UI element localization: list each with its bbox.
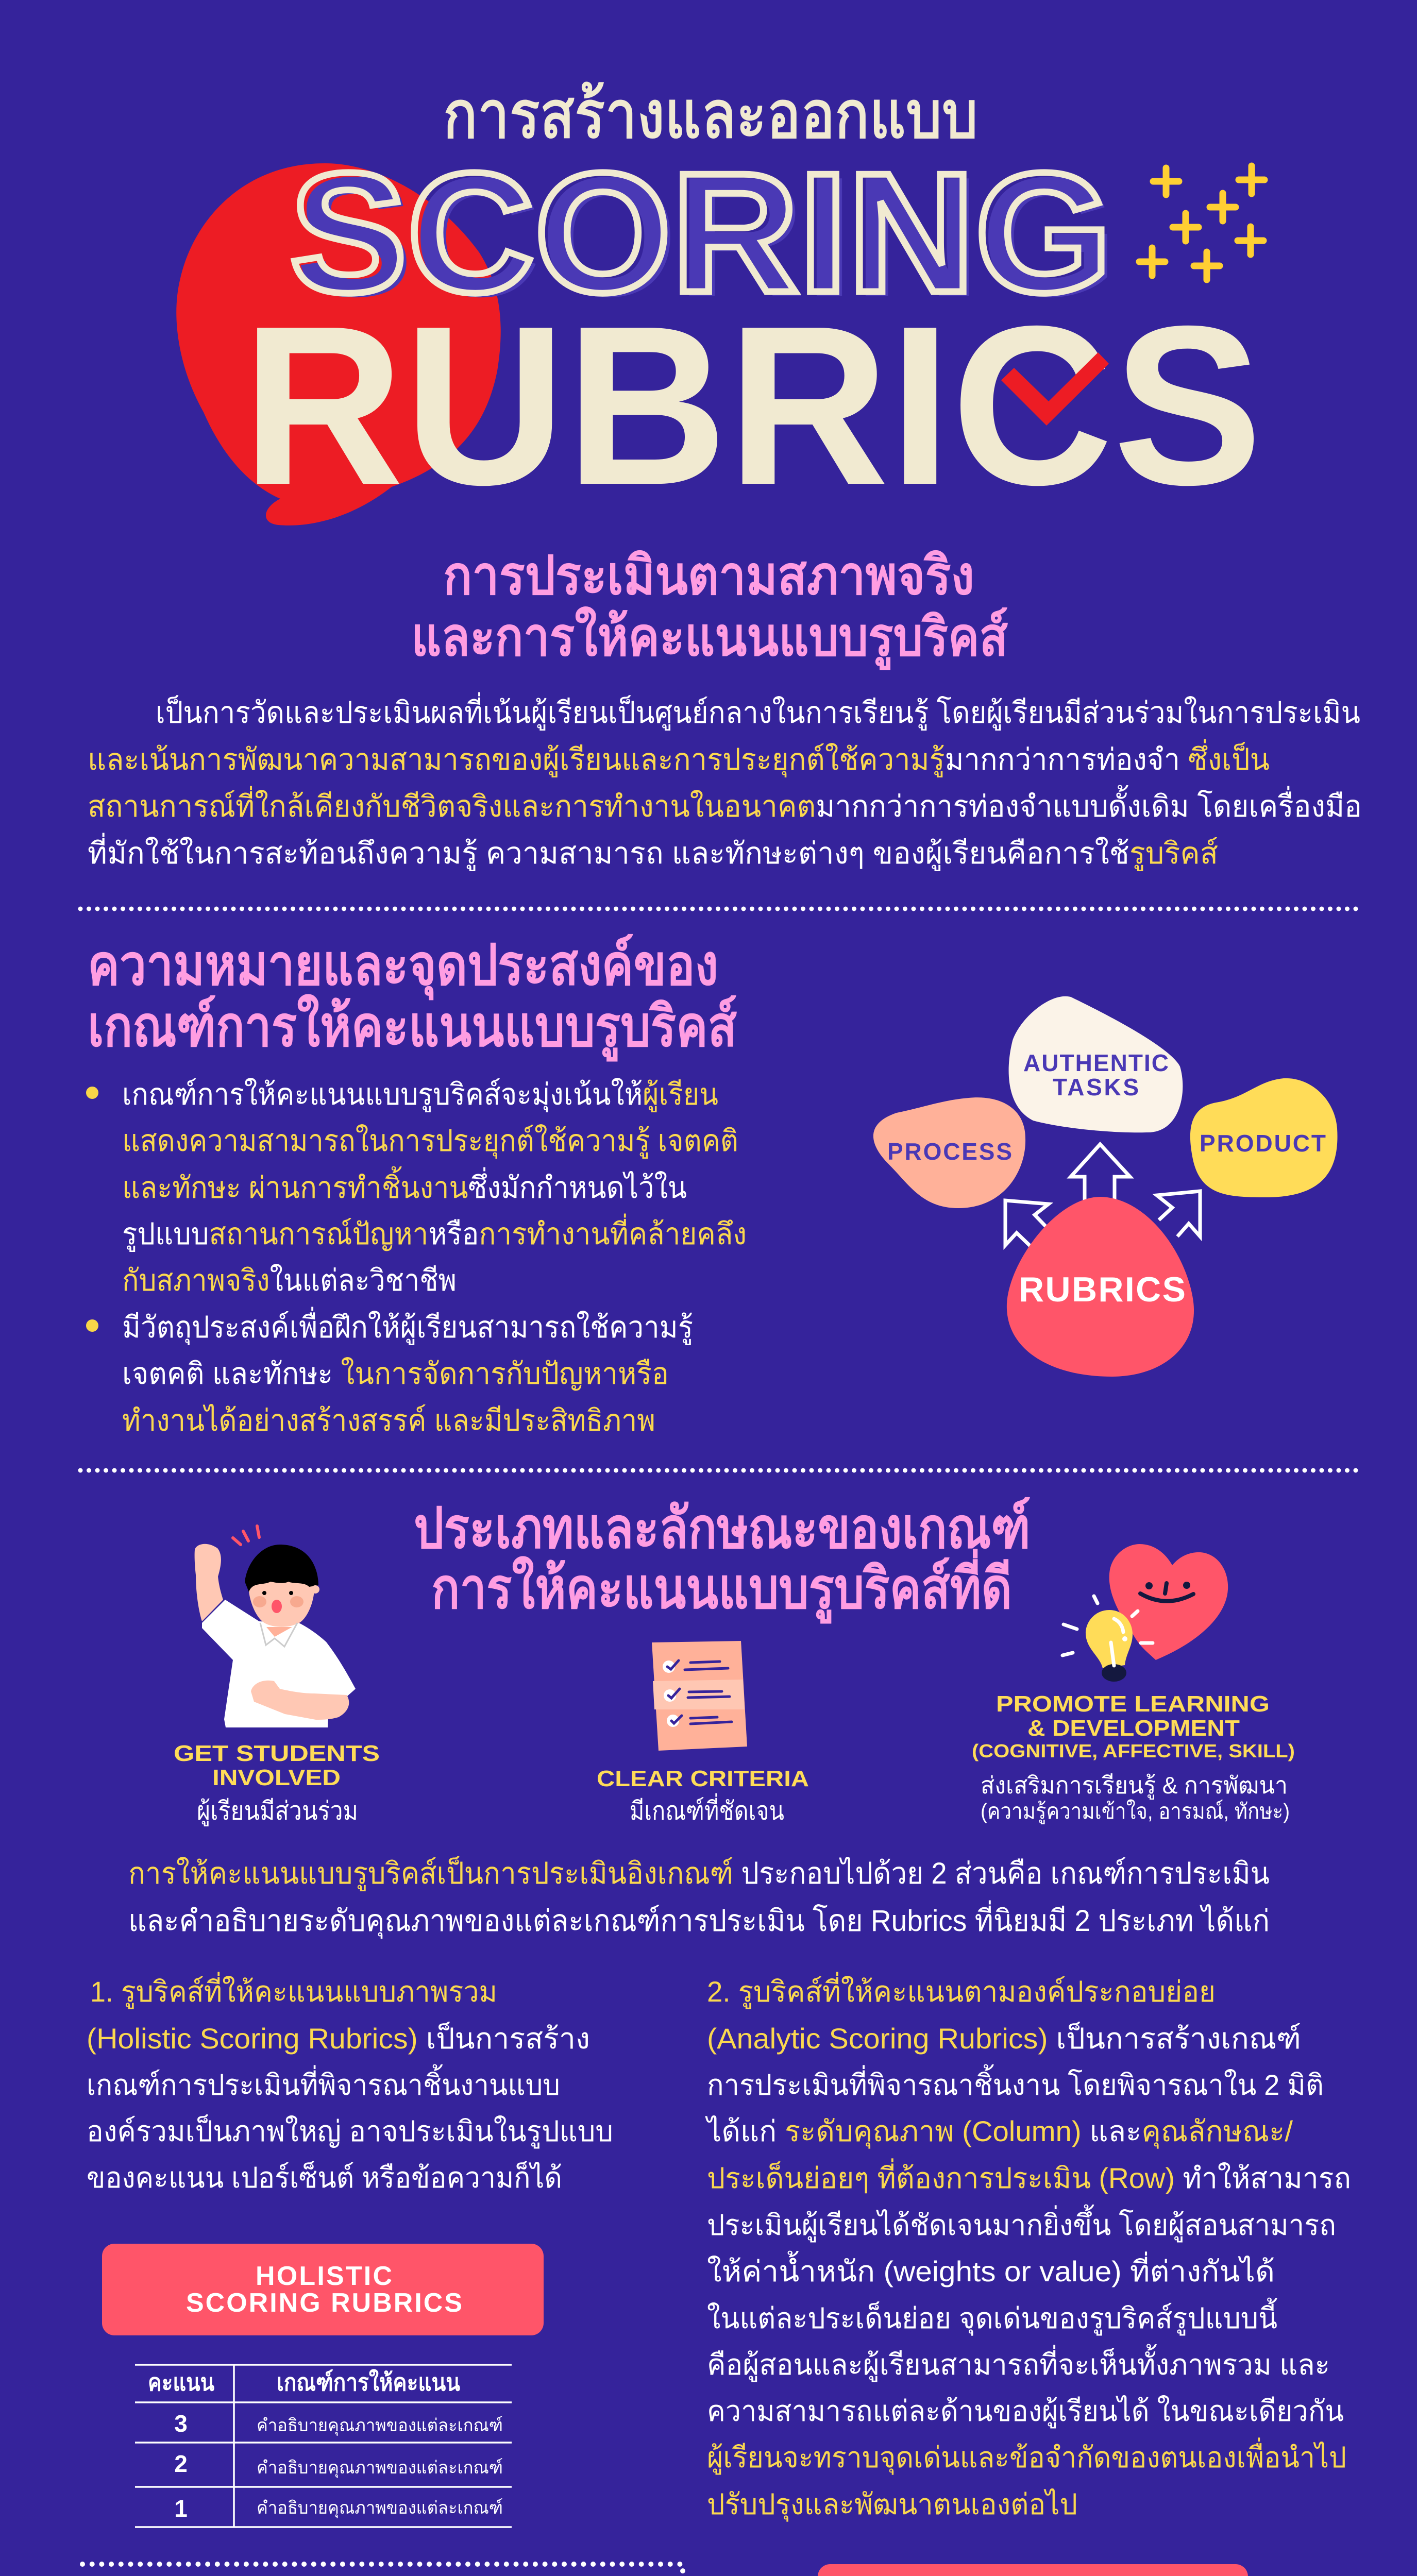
table: holistic rubric: 2 <box>174 2450 188 2477</box>
bullet 2 text <box>122 1307 693 1437</box>
table: holistic rubric: เกณฑ์การให้คะแนน <box>277 2368 460 2396</box>
heading: types and characteristics: ประเภทและลักษณะของเกณฑ์ <box>414 1497 1031 1560</box>
blob: process <box>873 1097 1025 1208</box>
table: holistic rubric: คะแนน <box>148 2369 214 2396</box>
table: holistic rubric: คำอธิบายคุณภาพของแต่ละเกณฑ์ <box>257 2458 503 2478</box>
text block: intro paragraph: และเน้นการพัฒนาความสามารถของผู้เรียนและการประยุกต์ใช้ความรู้มากกว่าการท่องจำ ซึ่งเป็น <box>88 739 1270 778</box>
heading: types and characteristics <box>414 1497 1031 1624</box>
text block: holistic rubric: 1. รูบริคส์ที่ให้คะแนนแบบภาพรวม <box>90 1972 497 2009</box>
icon: red check mark <box>1001 352 1109 426</box>
heading: meaning and purpose: ความหมายและจุดประสงค์ของ <box>88 934 718 1001</box>
table: holistic rubric: 1 <box>174 2495 188 2522</box>
icon: heart and light bulb <box>1062 1544 1228 1682</box>
icon: red speech bubble <box>176 163 501 526</box>
bullet 2 text: ทำงานได้อย่างสร้างสรรค์ และมีประสิทธิภาพ <box>122 1403 655 1437</box>
label: promote learning and development: & DEVELOPMENT <box>1027 1716 1240 1741</box>
icon: checklist <box>652 1641 747 1751</box>
bullet 1 text: และทักษะ ผ่านการทำชิ้นงานซึ่งมักกำหนดไว้ใน <box>122 1166 687 1205</box>
label: get students involved: GET STUDENTS <box>174 1741 380 1766</box>
label: clear criteria: CLEAR CRITERIA <box>597 1766 809 1791</box>
banner: holistic scoring rubrics: HOLISTIC <box>256 2261 392 2291</box>
table: holistic rubric: คำอธิบายคุณภาพของแต่ละเกณฑ์ <box>257 2416 503 2436</box>
text block: rubric types intro: การให้คะแนนแบบรูบริคส์เป็นการประเมินอิงเกณฑ์ ประกอบไปด้วย 2 ส่วนคือ เกณฑ์การประเมิน <box>128 1856 1270 1891</box>
blob: authentic tasks: TASKS <box>1053 1074 1139 1100</box>
text block: analytic rubric: ได้แก่ ระดับคุณภาพ (Column) และคุณลักษณะ/ <box>705 2115 1293 2149</box>
label: promote learning and development: (COGNITIVE, AFFECTIVE, SKILL) <box>972 1740 1295 1761</box>
label: promote learning and development <box>972 1691 1295 1824</box>
label: get students involved: ผู้เรียนมีส่วนร่วม <box>197 1797 358 1826</box>
text block: analytic rubric: คือผู้สอนและผู้เรียนสามารถที่จะเห็นทั้งภาพรวม และ <box>707 2344 1330 2382</box>
text block: holistic rubric <box>87 1972 613 2194</box>
arrows from rubrics <box>1005 1144 1200 1246</box>
label: get students involved: INVOLVED <box>212 1765 341 1790</box>
blob: product: PRODUCT <box>1200 1130 1326 1157</box>
text block: intro paragraph: เป็นการวัดและประเมินผลที่เน้นผู้เรียนเป็นศูนย์กลางในการเรียนรู้ โดยผู้เรียนมีส่วนร่วมในการประเมิน <box>156 692 1360 731</box>
diagram: rubrics blobs <box>873 996 1338 1377</box>
heading: authentic assessment: และการให้คะแนนแบบรูบริคส์ <box>411 606 1008 670</box>
title: RUBRICS: RUBRICS <box>242 279 1262 532</box>
blob: rubrics: RUBRICS <box>1019 1270 1186 1309</box>
blob: authentic tasks <box>1009 996 1183 1132</box>
icon: yellow sparkles <box>1139 166 1264 280</box>
bullet 1 text <box>122 1077 747 1297</box>
label: get students involved <box>174 1741 380 1826</box>
label: promote learning and development: PROMOTE LEARNING <box>996 1691 1270 1717</box>
title: SCORING: SCORING <box>290 138 1112 328</box>
text block: holistic rubric: เกณฑ์การประเมินที่พิจารณาชิ้นงานแบบ <box>87 2064 560 2101</box>
title: SCORING: SCORING <box>296 142 1118 332</box>
bullet 1 <box>86 1087 98 1099</box>
text block: rubric types intro: และคำอธิบายระดับคุณภาพของแต่ละเกณฑ์การประเมิน โดย Rubrics ที่นิยมมี 2 ประเภท ได้แก่ <box>128 1900 1270 1939</box>
banner: holistic scoring rubrics: SCORING RUBRICS <box>186 2288 462 2318</box>
blob: process: PROCESS <box>887 1138 1012 1165</box>
heading: authentic assessment <box>411 546 1008 670</box>
bullet 2 <box>86 1319 98 1332</box>
text block: intro paragraph: ที่มักใช้ในการสะท้อนถึงความรู้ ความสามารถ และทักษะต่างๆ ของผู้เรียนคือการใช้รูบริคส์ <box>88 833 1218 871</box>
text block: purpose bullets <box>86 1077 747 1437</box>
heading: meaning and purpose <box>88 934 737 1062</box>
text block: analytic rubric: การประเมินที่พิจารณาชิ้นงาน โดยพิจารณาใน 2 มิติ <box>707 2064 1324 2101</box>
label: promote learning and development: (ความรู้ความเข้าใจ, อารมณ์, ทักษะ) <box>981 1799 1290 1824</box>
bullet 1 text: เกณฑ์การให้คะแนนแบบรูบริคส์จะมุ่งเน้นให้ผู้เรียน <box>122 1077 718 1113</box>
text block: intro paragraph <box>88 692 1362 871</box>
heading: types and characteristics: การให้คะแนนแบบรูบริคส์ที่ดี <box>431 1549 1012 1624</box>
bullet 2 text: เจตคติ และทักษะ ในการจัดการกับปัญหาหรือ <box>122 1357 669 1391</box>
blob: product <box>1190 1078 1338 1197</box>
text block: analytic rubric: (Analytic Scoring Rubrics) เป็นการสร้างเกณฑ์ <box>707 2021 1301 2055</box>
heading: meaning and purpose: เกณฑ์การให้คะแนนแบบรูบริคส์ <box>88 994 737 1062</box>
bullet 1 text: แสดงความสามารถในการประยุกต์ใช้ความรู้ เจตคติ <box>122 1124 738 1159</box>
blob: rubrics <box>1007 1197 1194 1377</box>
label: promote learning and development: ส่งเสริมการเรียนรู้ & การพัฒนา <box>981 1772 1288 1800</box>
table: holistic rubric <box>135 2365 512 2527</box>
text block: holistic rubric: องค์รวมเป็นภาพใหญ่ อาจประเมินในรูปแบบ <box>87 2114 613 2149</box>
label: clear criteria: มีเกณฑ์ที่ชัดเจน <box>630 1793 784 1825</box>
text block: holistic rubric: (Holistic Scoring Rubrics) เป็นการสร้าง <box>87 2021 590 2055</box>
bullet 2 text: มีวัตถุประสงค์เพื่อฝึกให้ผู้เรียนสามารถใช้ความรู้ <box>122 1307 693 1346</box>
text block: analytic rubric: ให้ค่าน้ำหนัก (weights or value) ที่ต่างกันได้ <box>707 2251 1275 2287</box>
text block: rubric types intro <box>128 1856 1270 1939</box>
text block: analytic rubric <box>705 1972 1351 2522</box>
text block: analytic rubric: ประเด็นย่อยๆ ที่ต้องการประเมิน (Row) ทำให้สามารถ <box>707 2158 1351 2194</box>
blob: authentic tasks: AUTHENTIC <box>1023 1049 1169 1076</box>
banner: holistic scoring rubrics <box>102 2244 544 2335</box>
heading: authentic assessment: การประเมินตามสภาพจริง <box>443 546 974 606</box>
text block: analytic rubric: ปรับปรุงและพัฒนาตนเองต่อไป <box>707 2488 1077 2522</box>
bullet 1 text: กับสภาพจริงในแต่ละวิชาชีพ <box>122 1263 457 1297</box>
text block: analytic rubric: ความสามารถแต่ละด้านของผู้เรียนได้ ในขณะเดียวกัน <box>707 2395 1344 2429</box>
bullet 1 text: รูปแบบสถานการณ์ปัญหาหรือการทำงานที่คล้ายคลึง <box>122 1213 747 1252</box>
table: holistic rubric: 3 <box>174 2410 188 2437</box>
text block: analytic rubric: ประเมินผู้เรียนได้ชัดเจนมากยิ่งขึ้น โดยผู้สอนสามารถ <box>707 2205 1336 2243</box>
label: clear criteria <box>597 1766 809 1825</box>
text block: analytic rubric: ในแต่ละประเด็นย่อย จุดเด่นของรูบริคส์รูปแบบนี้ <box>707 2298 1277 2336</box>
text block: holistic rubric: ของคะแนน เปอร์เซ็นต์ หรือข้อความก็ได้ <box>87 2160 562 2194</box>
icon: student raising hand <box>195 1526 356 1727</box>
title: Thai overline: การสร้างและออกแบบ <box>443 78 978 152</box>
text block: analytic rubric: ผู้เรียนจะทราบจุดเด่นและข้อจำกัดของตนเองเพื่อนำไป <box>707 2437 1346 2475</box>
text block: intro paragraph: สถานการณ์ที่ใกล้เคียงกับชีวิตจริงและการทำงานในอนาคตมากกว่าการท่องจำแบบดั้งเดิม โดยเครื่องมือ <box>88 785 1362 823</box>
title block <box>176 78 1264 532</box>
table: holistic rubric: คำอธิบายคุณภาพของแต่ละเกณฑ์ <box>257 2498 503 2518</box>
text block: analytic rubric: 2. รูบริคส์ที่ให้คะแนนตามองค์ประกอบย่อย <box>707 1972 1216 2009</box>
banner: analytic scoring rubrics <box>818 2564 1248 2576</box>
